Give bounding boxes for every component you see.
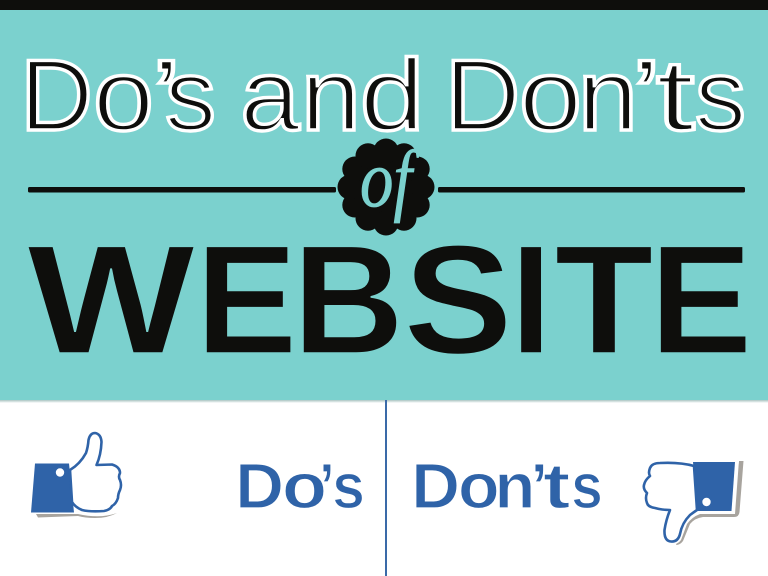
heading: Do's and Don'ts: s [165, 40, 216, 152]
heading: Do's and Don'ts: d [360, 40, 424, 152]
label: Do's: o [282, 450, 327, 522]
heading: WEBSITE: T [555, 213, 653, 386]
label: Don'ts: s [571, 450, 603, 522]
panel: teal header [0, 0, 768, 403]
heading: Do's and Don'ts: s [695, 40, 746, 152]
icon: thumbs down [644, 460, 744, 545]
heading: WEBSITE: I [510, 213, 552, 386]
heading: WEBSITE: W [27, 213, 196, 386]
heading: Do's and Don'ts: ’ [631, 40, 662, 152]
heading: WEBSITE: E [196, 213, 297, 386]
divider line right [438, 187, 745, 192]
label: Don'ts: ’ [530, 450, 548, 522]
heading: Do's and Don'ts: D [445, 40, 520, 152]
label: Don'ts: o [458, 450, 500, 522]
heading: Do's and Don'ts: n [578, 40, 638, 152]
center divider [385, 400, 387, 576]
heading: Do's and Don'ts: ’ [151, 40, 182, 152]
divider line left [28, 187, 336, 192]
label: Don'ts: n [494, 450, 535, 522]
heading: Do's and Don'ts: D [20, 40, 93, 152]
icon: thumbs up [31, 433, 121, 518]
label: Do's: D [235, 450, 284, 522]
heading: Do's and Don'ts: a [240, 40, 301, 152]
heading: Do's and Don'ts: t [656, 40, 695, 152]
heading: WEBSITE: E [650, 213, 752, 386]
label: Don'ts: t [543, 450, 570, 522]
label: Do's: ’ [319, 450, 335, 522]
label: Don'ts: D [411, 450, 460, 522]
label: Do's: s [332, 450, 365, 522]
heading: WEBSITE: B [293, 213, 404, 386]
heading: Do's and Don'ts: n [301, 40, 361, 152]
heading: Do's and Don'ts: o [93, 40, 154, 152]
heading: WEBSITE: S [404, 213, 513, 386]
badge: of: of [360, 136, 420, 224]
badge: of [338, 136, 434, 236]
heading: Do's and Don'ts: o [519, 40, 582, 152]
